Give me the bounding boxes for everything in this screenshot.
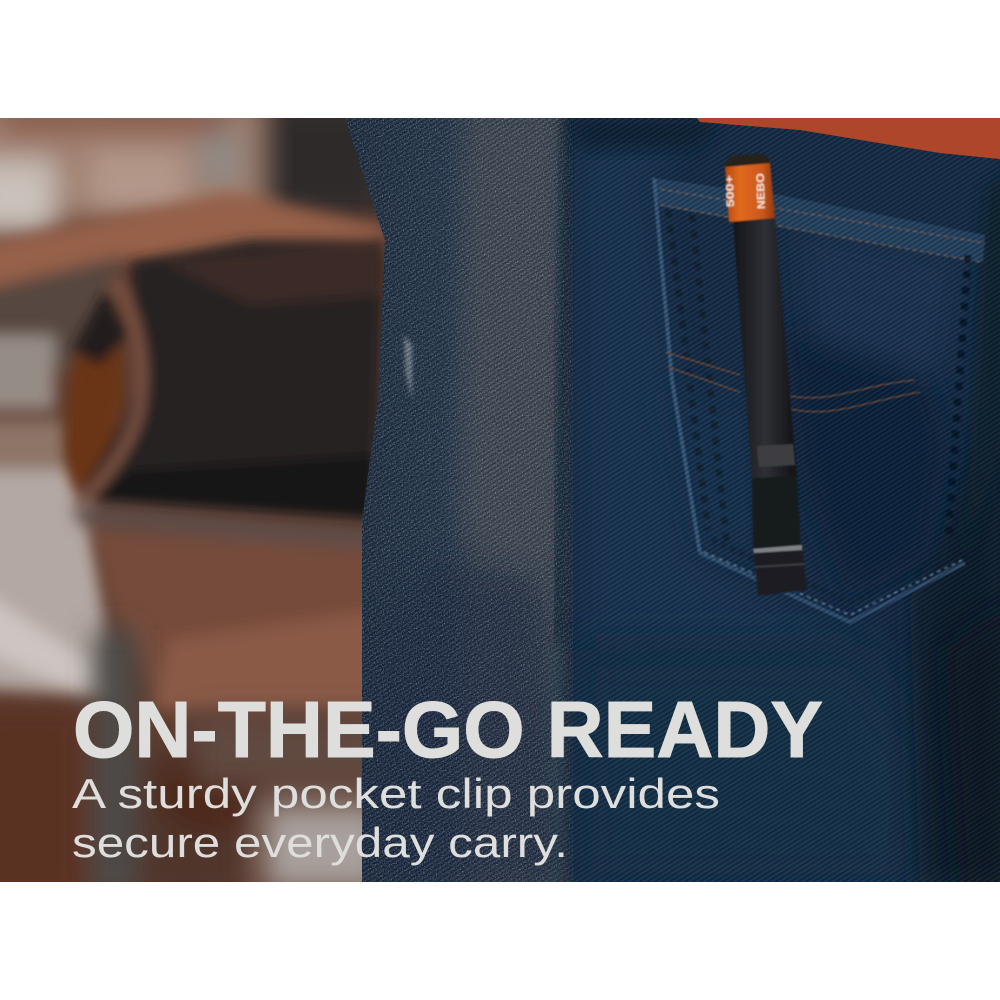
- flashlight head: [753, 545, 807, 596]
- description line 1: A sturdy pocket clip provides: [72, 770, 720, 817]
- right leg shading: [570, 118, 1000, 890]
- flashlight orange cap: [724, 154, 775, 222]
- orange shirt hem: [696, 118, 1000, 159]
- label: NEBO: NEBO: [755, 172, 768, 209]
- infographic canvas: [0, 118, 1000, 882]
- denim speckle on fold: [345, 118, 573, 882]
- heading: ON-THE-GO READY: [73, 685, 823, 774]
- jeans: [340, 110, 1000, 890]
- heading and description: [72, 685, 823, 866]
- description line 2: secure everyday carry.: [72, 819, 568, 866]
- label: 500+: 500+: [724, 175, 737, 207]
- back pocket: [652, 178, 985, 622]
- flashlight knurled band: [757, 444, 795, 467]
- flashlight lower barrel: [752, 476, 801, 550]
- trouser fold, left leg: [340, 110, 573, 890]
- denim twill texture: [345, 118, 1000, 882]
- flashlight body: [733, 217, 797, 480]
- flashlight: [724, 154, 807, 596]
- blurred workshop background: [0, 100, 400, 905]
